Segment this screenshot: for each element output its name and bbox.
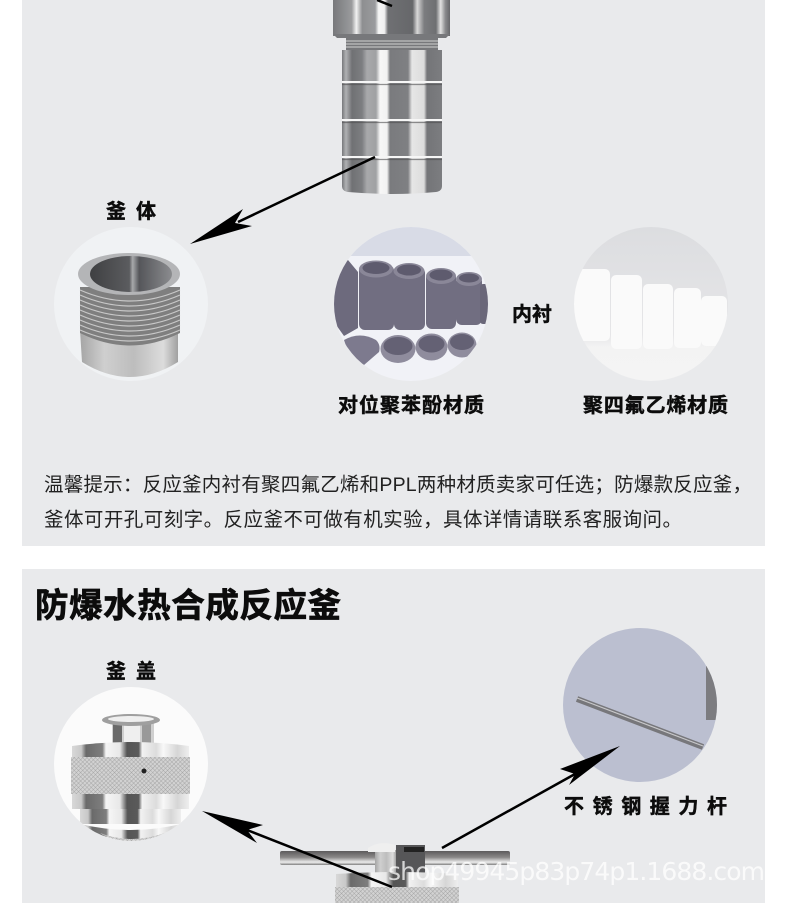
label: stainless steel grip rod: 不 锈 钢 握 力 杆 <box>564 795 727 818</box>
label: para-polyphenol material: 对位聚苯酚材质 <box>338 393 484 417</box>
arrow: reactor body to body part <box>190 157 375 244</box>
text block: notice: 釜体可开孔可刻字。反应釜不可做有机实验，具体详情请联系客服询问。 <box>44 509 682 531</box>
text block: notice: 温馨提示：反应釜内衬有聚四氟乙烯和PPL两种材质卖家可任选；防爆款反应釜， <box>44 474 752 496</box>
arrow: grip rod <box>442 746 620 848</box>
arrow: lid <box>202 811 392 887</box>
circle: stainless steel grip rod <box>563 628 718 782</box>
panel: explosion-proof reactor <box>22 569 765 903</box>
title: 防爆水热合成反应釜 <box>35 588 341 625</box>
text block: notice <box>44 474 752 531</box>
circle: PTFE lining <box>574 227 728 381</box>
circle: reactor body part <box>78 253 180 377</box>
label: reactor lid: 釜 盖 <box>106 660 156 683</box>
watermark: shop49945p83p74p1.1688.com <box>388 857 765 886</box>
circle: reactor lid part <box>54 687 208 841</box>
label: PTFE material: 聚四氟乙烯材质 <box>583 394 728 417</box>
circle: para-polyphenol lining <box>334 227 490 381</box>
panel: upper reactor parts <box>22 0 765 546</box>
reactor body photo <box>333 0 450 194</box>
label: reactor body: 釜 体 <box>106 200 156 223</box>
label: inner lining: 内衬 <box>512 303 552 326</box>
reactor top photo <box>280 843 510 903</box>
